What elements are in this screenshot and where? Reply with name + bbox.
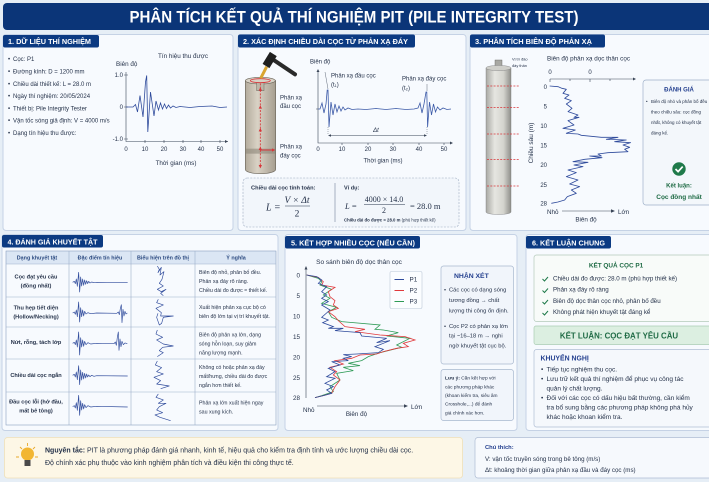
- chart: reflections: Phản xạ đáy cọc: [402, 76, 446, 82]
- principle note: Nguyên tắc: PIT là phương pháp đánh giá nhanh, kinh tế, hiệu quả cho kiểm tra định tính và ước lượng chiều dài cọc.: [45, 446, 413, 454]
- chart: amplitude along shaft: Biên độ phản xạ dọc thân cọc: [547, 56, 630, 62]
- column: meaning: Xuất hiện phản xạ cục bộ có: [199, 305, 266, 311]
- chart: amplitude along shaft: Biên độ: [575, 216, 597, 224]
- legend note: [475, 438, 709, 478]
- legend note: Chú thích:: [485, 445, 514, 451]
- legend: P3: [410, 298, 418, 306]
- formula box: 4000 × 14.0: [365, 195, 403, 204]
- formula box: Ví dụ:: [344, 186, 359, 192]
- chart: comparison: 20: [293, 354, 300, 362]
- column: meaning: Chiều dài đo được ≈ thiết kế.: [199, 288, 267, 294]
- callout: assessment: •: [646, 99, 648, 104]
- callout: observations: lượng thi công ổn định.: [449, 308, 509, 314]
- column: defect types: Chiều dài cọc ngắn: [10, 372, 62, 379]
- chart: reflections: (t₂): [402, 86, 410, 92]
- test data list: •: [8, 70, 10, 76]
- column: meaning: sau xung kích.: [199, 410, 233, 416]
- chart: amplitude along shaft: 0: [588, 70, 592, 76]
- icon: pile with hammer: [245, 54, 295, 174]
- test data list: •: [8, 57, 10, 63]
- column: defect types: Đầu cọc lỗi (hở đầu,: [9, 398, 63, 406]
- heading 6: 6. KẾT LUẬN CHUNG: [532, 238, 606, 248]
- box: results P1: Chiều dài đo được: 28.0 m (phù hợp thiết kế): [553, 276, 677, 282]
- panel: 5 multiple piles: [285, 234, 517, 430]
- box: recommendations: quản lý chất lượng.: [546, 384, 603, 392]
- test data list: Đường kính: D = 1200 mm: [13, 70, 84, 76]
- chart: received signal: 40: [198, 147, 205, 153]
- legend: [390, 272, 422, 308]
- chart: reflections: 20: [365, 147, 372, 153]
- box: recommendations: •: [541, 366, 544, 374]
- chart: reflections: (t₁): [331, 82, 339, 88]
- chart: received signal: [113, 53, 228, 167]
- test data list: •: [8, 106, 10, 112]
- chart: comparison: Nhỏ: [303, 406, 315, 414]
- legend note: V: vận tốc truyền sóng trong bê tông (m/s): [485, 456, 600, 463]
- chart: reflections: 0: [316, 147, 320, 153]
- panel: 2 pile length from toe reflection: [238, 34, 466, 230]
- test data list: Cọc: P1: [13, 57, 35, 63]
- callout: observations: Các cọc có dạng sóng: [449, 288, 506, 294]
- callout: assessment: đáng kể.: [651, 130, 668, 136]
- heading 2: 2. XÁC ĐỊNH CHIỀU DÀI CỌC TỪ PHẢN XẠ ĐÁY: [243, 36, 408, 46]
- box: recommendations: KHUYẾN NGHỊ: [540, 352, 589, 362]
- icon: pile cylinder: Vị trí đào: [512, 56, 528, 62]
- chart: reflections: 40: [416, 147, 423, 153]
- heading 5: 5. KẾT HỢP NHIỀU CỌC (NẾU CẦN): [291, 238, 415, 248]
- pile labels: [280, 96, 303, 160]
- chart: reflections: Phản xạ đầu cọc: [331, 74, 376, 80]
- box: results P1: Phản xạ đáy rõ ràng: [553, 286, 609, 294]
- heading 6: [526, 236, 611, 248]
- callout: assessment: Biên độ nhỏ và phân bố đều: [651, 98, 708, 104]
- chart: received signal: 0: [120, 105, 124, 111]
- column: meaning: Phản xạ đáy rõ ràng.: [199, 279, 248, 285]
- chart: amplitude along shaft: 28: [540, 202, 548, 208]
- column: defect types: mất bê tông): [19, 408, 53, 414]
- formula box: = 28.0 m: [410, 201, 441, 211]
- chart: received signal: 10: [142, 147, 149, 153]
- chart: amplitude along shaft: 0: [544, 85, 548, 91]
- chart: comparison: So sánh biên độ dọc thân cọc: [316, 259, 403, 266]
- callout: observations: •: [444, 288, 446, 294]
- icon: check: [672, 162, 686, 176]
- column: meaning: mất/hưng, chiều dài đo được: [199, 374, 268, 380]
- icon: pile cylinder: đáy thân: [512, 63, 527, 68]
- legend: P1: [410, 276, 418, 284]
- heading 4: 4. ĐÁNH GIÁ KHUYẾT TẬT: [8, 236, 98, 246]
- defect table: [6, 251, 276, 425]
- callout: observations: NHẬN XÉT: [454, 271, 490, 280]
- chart: amplitude along shaft: Chiều sâu (m): [526, 123, 535, 163]
- chart: comparison: Biên độ: [346, 411, 368, 418]
- column: meaning: ngắn hơn thiết kế.: [199, 382, 242, 389]
- box: recommendations: Đối với các cọc có dấu hiệu bất thường, cần kiểm: [546, 393, 690, 402]
- callout: assessment: [643, 80, 709, 205]
- conclusion banner: KẾT LUẬN: CỌC ĐẠT YÊU CẦU: [560, 330, 678, 340]
- panel: 6 general conclusion: [526, 234, 709, 430]
- box: results P1: [534, 255, 709, 322]
- box: recommendations: Tiếp tục nghiệm thu cọc.: [546, 364, 617, 374]
- icon: light bulb: [16, 443, 38, 466]
- callout: observations: [441, 266, 514, 364]
- legend: P2: [410, 288, 418, 294]
- title banner: PHÂN TÍCH KẾT QUẢ THÍ NGHIỆM PIT (PILE INTEGRITY TEST): [130, 8, 578, 26]
- heading 3: 3. PHÂN TÍCH BIÊN ĐỘ PHẢN XẠ: [475, 37, 592, 46]
- column: meaning: Phản xạ lớn xuất hiện ngay: [199, 400, 264, 406]
- callout: assessment: Cọc đồng nhất: [656, 192, 703, 201]
- formula box: V × Δt: [284, 196, 310, 206]
- test data list: •: [8, 118, 10, 124]
- title banner: [3, 3, 709, 30]
- callout: observations: Cọc P2 có phản xạ lớn: [449, 324, 508, 330]
- chart: received signal: 30: [180, 147, 187, 153]
- column: meaning: Biên độ phản xạ lớn, dạng: [199, 332, 261, 338]
- chart: comparison: 15: [293, 334, 300, 341]
- chart: comparison: 28: [293, 395, 300, 402]
- callout: assessment: nhất, không có khuyết tật: [651, 120, 702, 125]
- table header: Ý nghĩa: [226, 254, 247, 262]
- chart: received signal: Thời gian (ms): [156, 160, 196, 167]
- callout: assessment: Kết luận:: [666, 182, 692, 190]
- column: meaning: sóng hỗn loạn, suy giảm: [199, 340, 257, 348]
- column: defect types: (đồng nhất): [21, 282, 52, 290]
- formula box: Chiều dài cọc tính toán:: [251, 186, 316, 192]
- box: results P1: KẾT QUẢ CỌC P1: [589, 260, 644, 270]
- chart: received signal: 50: [217, 147, 224, 153]
- test data list: Dạng tín hiệu thu được:: [13, 131, 77, 137]
- chart: comparison: [293, 259, 423, 418]
- chart: comparison: 25: [293, 375, 300, 382]
- chart: reflections: Thời gian (ms): [364, 158, 402, 164]
- test data list: •: [8, 131, 10, 137]
- table header: Đặc điểm tín hiệu: [78, 254, 122, 262]
- callout: observations: ngờ khuyết tật cục bộ.: [449, 344, 507, 350]
- formula box: L =: [344, 201, 357, 211]
- heading 4: [2, 235, 103, 248]
- chart: amplitude along shaft: [526, 56, 636, 224]
- chart: received signal: 0: [124, 147, 128, 153]
- pile labels: đáy cọc: [280, 154, 301, 160]
- table header: Dạng khuyết tật: [17, 254, 57, 262]
- column: defect types: Thu hẹp tiết diện: [14, 304, 59, 312]
- pile labels: đầu cọc: [280, 104, 301, 110]
- column: meaning: [199, 269, 270, 416]
- chart: amplitude along shaft: 15: [540, 144, 548, 150]
- callout: assessment: theo chiều sâu: cọc đồng: [651, 110, 702, 114]
- chart: amplitude along shaft: 5: [544, 104, 548, 110]
- column: meaning: Biên độ nhỏ, phân bố đều.: [199, 269, 261, 276]
- column: meaning: biên độ lớn tại vị trí khuyết tật.: [199, 314, 270, 320]
- chart: received signal: 20: [161, 147, 168, 153]
- callout: observations: •: [444, 324, 446, 330]
- icon: pile cylinder: [486, 56, 528, 214]
- test data list: Thiết bị: Pile Integrity Tester: [13, 106, 87, 112]
- test data list: •: [8, 94, 10, 100]
- box: recommendations: •: [541, 395, 544, 402]
- box: results P1: Không phát hiện khuyết tật đáng kể: [553, 309, 651, 316]
- column: defect types: Nứt, rỗng, tách lớp: [11, 339, 62, 346]
- callout: note: giá chính xác hơn.: [445, 410, 484, 416]
- callout: note: các phương pháp khác: [445, 384, 495, 390]
- chart: amplitude along shaft: 25: [540, 183, 548, 189]
- column: meaning: Không có hoặc phản xạ đáy: [199, 365, 265, 371]
- box: results P1: Biên độ dọc thân cọc nhỏ, phân bố đều: [553, 298, 661, 305]
- chart: reflections: [310, 60, 453, 164]
- chart: amplitude along shaft: 10: [540, 124, 548, 130]
- pile labels: Phản xạ: [280, 96, 303, 102]
- column: meaning: năng lượng mạnh.: [199, 350, 243, 356]
- legend note: Δt: khoảng thời gian giữa phản xạ đầu và đáy cọc (ms): [485, 467, 636, 474]
- column: defect types: Cọc đạt yêu cầu: [15, 274, 58, 280]
- formula box: [243, 178, 459, 227]
- heading 3: [470, 34, 605, 48]
- chart: reflections: Δt: [372, 128, 379, 134]
- callout: observations: tại ~16–18 m → nghi: [449, 334, 503, 340]
- pile labels: Phản xạ: [280, 144, 303, 150]
- callout: note: Crosshole,...) để đánh: [445, 400, 493, 408]
- column: signal traces: [73, 272, 128, 415]
- panel: 4 defect assessment: [2, 234, 278, 430]
- chart: comparison: 0: [296, 272, 300, 280]
- formula box: 2: [382, 206, 386, 215]
- formula box: Chiều dài đo được = 28.0 m (phù hợp thiết kế): [344, 218, 436, 222]
- heading 1: [3, 35, 99, 48]
- heading 5: [285, 236, 420, 248]
- panel: 3 amplitude analysis: [470, 34, 709, 230]
- chart: amplitude along shaft: 20: [540, 163, 548, 169]
- callout: assessment: ĐÁNH GIÁ: [664, 86, 694, 94]
- box: recommendations: tra bổ sung bằng các phương pháp không phá hủy: [546, 402, 694, 412]
- chart: received signal: Biên độ: [116, 61, 138, 68]
- chart: amplitude along shaft: Lớn: [618, 209, 630, 216]
- chart: reflections: 30: [390, 147, 397, 153]
- principle note: Độ chính xác phụ thuộc vào kinh nghiệm phân tích và điều kiện thi công thực tế.: [45, 458, 294, 467]
- box: recommendations: khác hoặc khoan kiểm tra.: [546, 413, 623, 421]
- chart: comparison: 10: [293, 314, 300, 320]
- callout: note: [441, 370, 514, 420]
- chart: received signal: -1.0: [113, 137, 124, 143]
- callout: observations: tương đồng → chất: [449, 298, 500, 304]
- principle note: [4, 438, 462, 478]
- panel: 1 test data: [3, 34, 233, 230]
- formula box: 2: [295, 210, 300, 220]
- column: defect types: [9, 274, 63, 414]
- column: defect types: (Hollow/Necking): [13, 314, 59, 320]
- test data list: Vận tốc sóng giả định: V = 4000 m/s: [13, 118, 110, 124]
- table header: [17, 254, 247, 262]
- test data list: Chiều dài thiết kế: L = 28.0 m: [13, 82, 91, 88]
- heading 1: 1. DỮ LIỆU THÍ NGHIỆM: [8, 37, 91, 46]
- box: recommendations: •: [541, 376, 544, 383]
- box: recommendations: Lưu trữ kết quả thí nghiệm để phục vụ công tác: [546, 374, 684, 383]
- chart: received signal: Tín hiệu thu được: [158, 53, 208, 60]
- callout: note: (khoan kiểm tra, siêu âm: [445, 392, 498, 399]
- callout: note: Lưu ý: Cần kết hợp với: [445, 376, 496, 382]
- test data list: Ngày thí nghiệm: 20/05/2024: [13, 94, 91, 100]
- chart: reflections: 10: [339, 147, 346, 153]
- chart: received signal: 1.0: [115, 73, 124, 79]
- chart: amplitude along shaft: 0: [548, 70, 552, 76]
- chart: reflections: 50: [441, 147, 448, 153]
- heading 2: [238, 34, 415, 48]
- test data list: [8, 57, 110, 137]
- box: recommendations: [534, 350, 709, 427]
- formula box: L =: [265, 202, 281, 214]
- chart: comparison: 5: [296, 293, 300, 300]
- conclusion banner: [534, 326, 709, 344]
- test data list: •: [8, 82, 10, 88]
- table header: Biểu hiện trên đồ thị: [137, 254, 190, 262]
- column: profile traces: [154, 266, 173, 421]
- chart: amplitude along shaft: Nhỏ: [547, 208, 559, 216]
- chart: comparison: Lớn: [411, 404, 423, 411]
- chart: reflections: Biên độ: [310, 60, 331, 66]
